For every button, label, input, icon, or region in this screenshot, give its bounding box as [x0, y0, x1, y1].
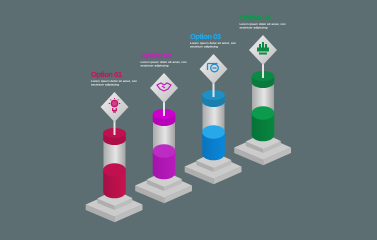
icon: dollar cycle	[208, 64, 218, 72]
option 03 text: Lorem ipsum dolor sit amet, con	[190, 41, 236, 45]
option 04 text: Lorem ipsum dolor sit amet, con	[240, 22, 286, 26]
pedestal 03	[185, 152, 242, 184]
option 01 text	[91, 70, 137, 86]
sign 04	[249, 35, 277, 65]
option 04 text: Option 04	[240, 13, 271, 22]
option 04 text	[240, 13, 286, 29]
column 04	[252, 81, 274, 115]
pole 01	[114, 120, 116, 135]
column 03	[202, 100, 224, 134]
option 01 text: Option 01	[91, 70, 122, 79]
icon: handshake	[157, 83, 171, 91]
option 03 text: Option 03	[190, 32, 221, 41]
column 02	[153, 119, 175, 153]
option 02 text: Option 02	[140, 51, 172, 60]
level cylinder 01	[103, 163, 126, 198]
pillar 04	[234, 13, 291, 165]
level cylinder 04	[252, 106, 274, 141]
sign 02	[150, 73, 178, 103]
option 02 text: sectetuer adipiscing	[140, 63, 169, 67]
option 03 text: sectetuer adipiscing	[190, 44, 218, 48]
option 01 text: Lorem ipsum dolor sit amet, con	[91, 79, 137, 83]
pole 02	[163, 101, 165, 116]
icon: light bulb	[109, 98, 120, 112]
level cylinder 03	[202, 125, 225, 160]
pillar 02	[135, 51, 192, 203]
pillar 03	[185, 32, 242, 184]
cap 01	[103, 128, 126, 145]
option 03 text	[190, 32, 236, 48]
pole 04	[262, 63, 264, 78]
sign 03	[200, 54, 228, 84]
column 01	[104, 138, 126, 172]
icon: green factory	[257, 42, 269, 54]
option 02 text: Lorem ipsum dolor sit amet, con	[140, 60, 187, 64]
pole 03	[212, 82, 214, 97]
option 02 text	[140, 51, 187, 67]
option 01 text: sectetuer adipiscing	[91, 82, 119, 86]
cap 04	[252, 71, 274, 88]
sign 01	[100, 92, 128, 122]
option 04 text: sectetuer adipiscing	[240, 25, 268, 29]
level cylinder 02	[153, 144, 175, 179]
cap 03	[202, 90, 225, 107]
pedestal 02	[135, 171, 192, 203]
pedestal 01	[86, 190, 142, 222]
pedestal 04	[234, 133, 291, 165]
pillar 01	[86, 70, 142, 222]
cap 02	[153, 109, 175, 126]
